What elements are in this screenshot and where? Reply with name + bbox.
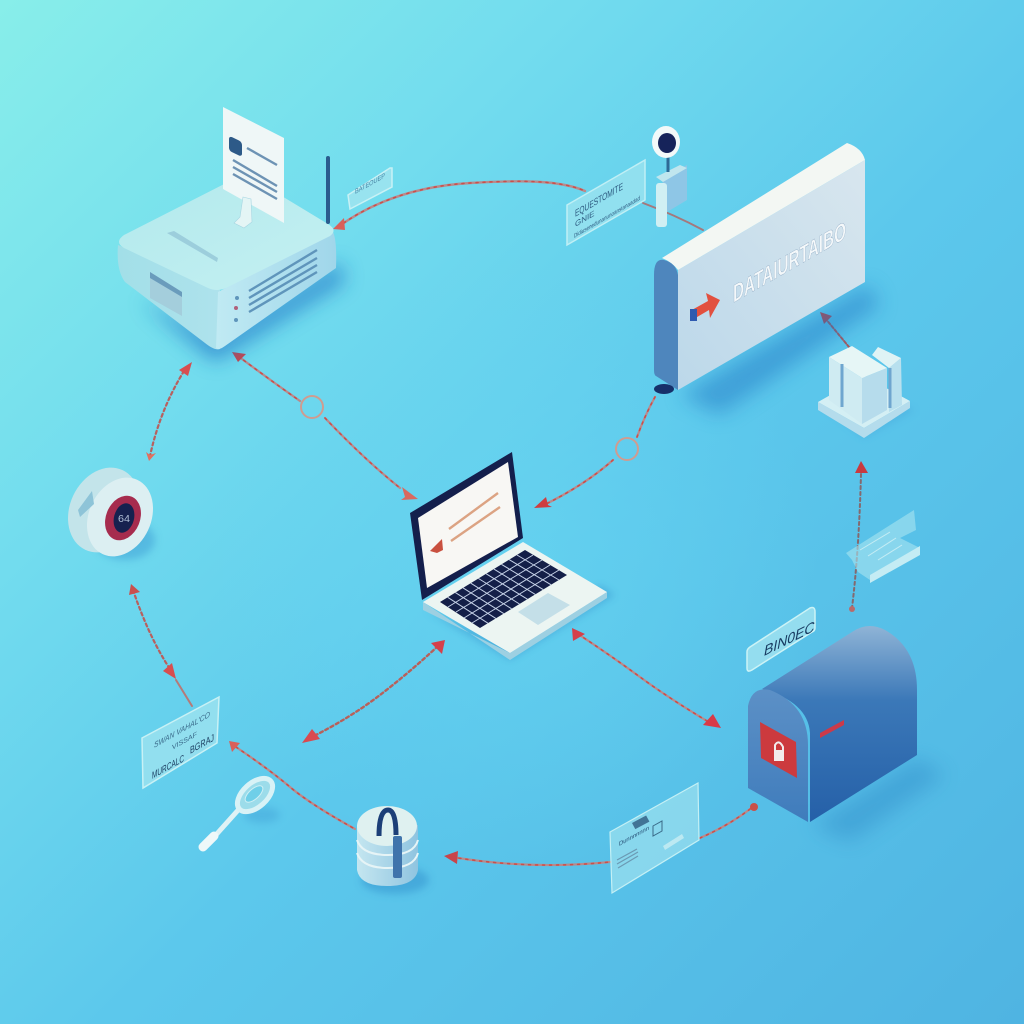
connector: left lower	[133, 590, 192, 706]
base plate	[818, 376, 910, 438]
arrowhead: laptop right	[534, 497, 552, 508]
label BIN0EC	[747, 608, 815, 671]
mailbox side	[762, 626, 917, 822]
arrowhead: router right	[333, 218, 345, 230]
arrowhead: mailbox	[703, 714, 721, 728]
router left face	[118, 245, 220, 349]
disc centre	[110, 501, 138, 535]
connector: lock to label	[236, 747, 355, 829]
disc face	[75, 467, 165, 567]
arrowheads	[129, 218, 868, 864]
router device with document	[118, 107, 345, 362]
arrowhead: firewall	[820, 312, 832, 324]
screen icon	[430, 539, 443, 553]
mailbox front	[748, 689, 808, 822]
document lines	[233, 148, 277, 199]
arrowhead: left down	[146, 452, 156, 461]
document sheet	[223, 107, 284, 223]
connector: left upper	[150, 371, 184, 456]
arrowhead: card right	[750, 803, 758, 811]
mailbox red slot	[820, 720, 844, 738]
tape disc	[55, 456, 165, 567]
arrowhead: router bottom	[232, 352, 246, 362]
connector: laptop to mailbox	[578, 634, 712, 724]
glass label: top centre: GNIE	[575, 208, 595, 229]
connector: card to lock	[452, 857, 610, 865]
panel top	[662, 143, 865, 270]
cylinder body	[357, 825, 418, 886]
router antenna	[326, 158, 330, 222]
connector: card to mailbox	[700, 806, 754, 838]
connector: laptop to lower left	[310, 646, 438, 738]
arrowhead: laptop lower left	[431, 640, 445, 654]
router vents	[249, 250, 317, 312]
disc rim	[55, 456, 153, 564]
cylinder top	[357, 806, 417, 846]
arrowhead: lower left up	[129, 584, 140, 595]
connector: stack to firewall	[825, 318, 849, 347]
stacked boxes	[818, 346, 915, 438]
trackpad	[518, 593, 570, 625]
arrowhead: lower far left	[302, 729, 320, 743]
disc red ring	[99, 490, 147, 546]
panel end	[654, 260, 678, 390]
connector: router to top label	[338, 181, 703, 230]
connector: mailbox to stack	[852, 474, 861, 608]
label BIN0EC: BIN0EC	[764, 619, 815, 660]
glass card bottom	[610, 783, 699, 893]
shackle	[379, 810, 396, 836]
router top face	[119, 176, 334, 290]
magnifier key	[203, 772, 280, 847]
arrowhead: left up	[179, 362, 192, 376]
glass label: top centre: EQUESTOMITE	[575, 181, 623, 220]
panel front	[678, 160, 865, 390]
panel label: DATAIURTAIBO	[733, 216, 846, 309]
disc notch	[78, 491, 94, 517]
disc glyph: 64	[118, 514, 130, 525]
arrowhead: label	[229, 741, 240, 752]
top small label: BATEOUEP	[355, 171, 385, 196]
connector: firewall to laptop	[542, 397, 655, 506]
mailbox	[748, 626, 945, 842]
arrowhead: laptop left	[401, 487, 418, 500]
arrowhead: stack top	[855, 461, 868, 473]
screen bars	[449, 493, 500, 541]
arrowhead: stack bottom	[849, 606, 855, 612]
box right	[872, 347, 902, 412]
laptop base	[423, 542, 607, 660]
strap	[393, 836, 402, 878]
top small label	[348, 168, 392, 209]
box left	[829, 346, 887, 424]
database lock	[357, 806, 429, 894]
arrowhead: lower left down	[163, 663, 176, 679]
glass card bottom: Dunnnnnnn	[619, 825, 649, 848]
glass label: top centre: Didiusenedunanunoanstanaadad	[574, 195, 640, 240]
document icon	[229, 136, 242, 157]
firewall panel	[654, 143, 880, 415]
padlock icon	[774, 742, 784, 761]
lock plate	[760, 722, 797, 778]
router right face	[216, 232, 336, 349]
laptop	[410, 452, 615, 660]
connector: router to laptop	[238, 356, 400, 488]
glass label: left	[142, 697, 219, 788]
glass label: left: MURCALC	[152, 753, 184, 782]
router front screen	[150, 272, 182, 316]
panel arrow	[690, 293, 720, 321]
glass label: left: BGRAJ	[190, 732, 214, 757]
glass label: top centre	[567, 160, 645, 245]
glass tray icon	[846, 510, 920, 583]
arrowhead: lock	[444, 851, 458, 864]
keyboard	[440, 550, 567, 628]
arrowhead: laptop lower right	[572, 628, 585, 641]
connector paths	[133, 181, 861, 865]
camera on post	[652, 126, 687, 227]
glass label: left: SWAN VAHAL'CO	[154, 709, 210, 750]
laptop screen	[410, 452, 523, 600]
router top slot	[167, 231, 218, 262]
document stand	[234, 197, 252, 228]
panel foot	[654, 384, 674, 394]
glass label: left: VISSAF	[172, 729, 197, 752]
router leds	[234, 296, 239, 322]
